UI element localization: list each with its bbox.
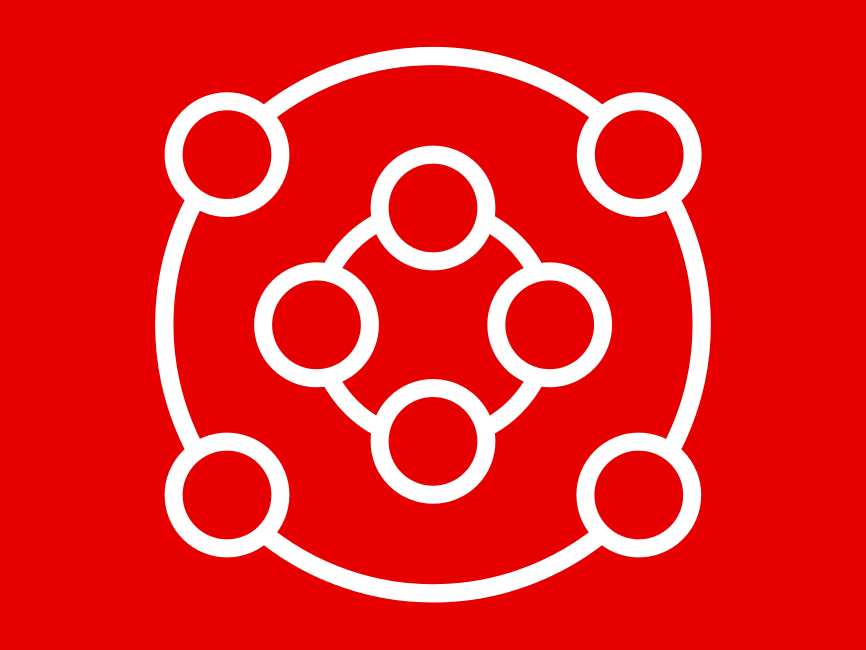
- inner ring: [317, 209, 549, 441]
- outer node: top right: [586, 101, 693, 208]
- inner node: left: [263, 271, 370, 378]
- outer ring: [164, 56, 702, 593]
- inner node: top: [380, 155, 486, 261]
- inner node: right: [496, 271, 603, 378]
- inner node: bottom: [380, 388, 486, 495]
- outer node: top left: [174, 101, 280, 208]
- outer node: bottom left: [174, 442, 280, 548]
- outer node: bottom right: [585, 442, 692, 548]
